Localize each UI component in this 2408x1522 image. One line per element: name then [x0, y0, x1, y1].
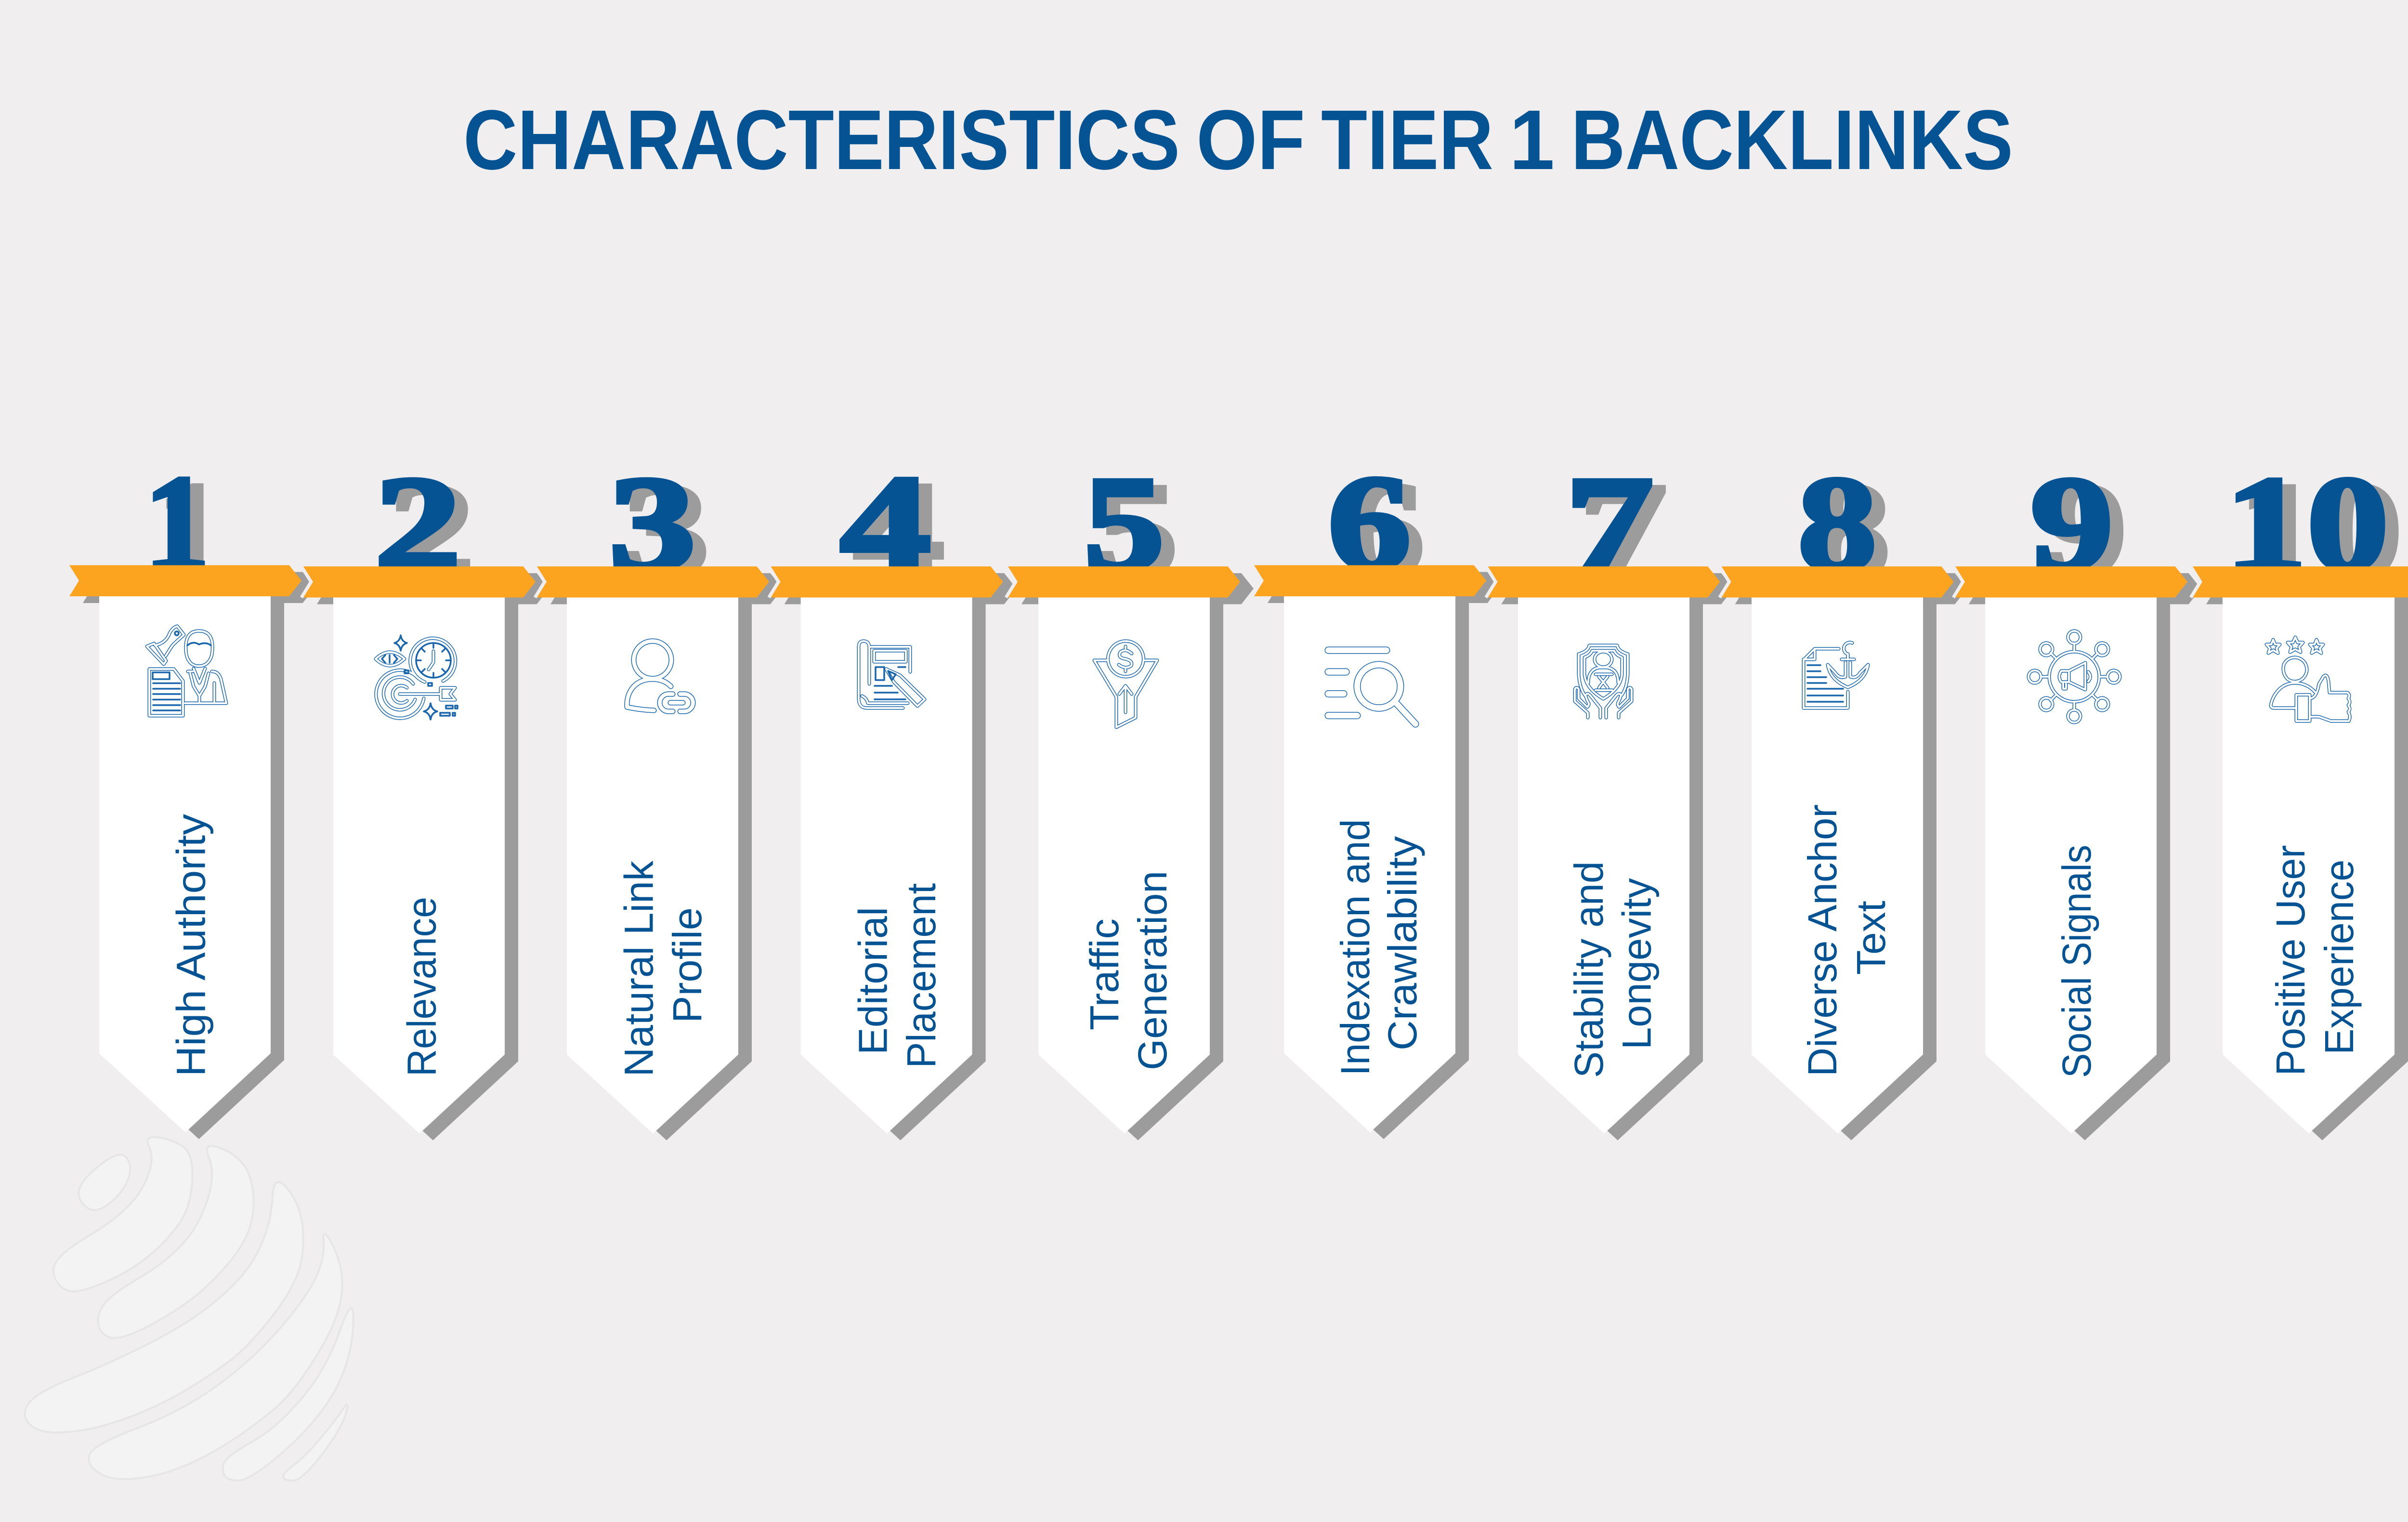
label [1333, 819, 1425, 1076]
icon: user with thumbs up and stars [2266, 637, 2350, 721]
number 6: 6 [1341, 454, 1425, 604]
label: Indexation and [1333, 819, 1378, 1076]
panel: card 8 Diverse Anchor Text [1720, 448, 1967, 1141]
title: OF [1196, 93, 1305, 187]
ribbon and card body [1006, 566, 1254, 1141]
panel: card 7 Stability and Longevity [1486, 448, 1734, 1141]
number 4: 4 [853, 454, 944, 604]
ribbon and card body [1254, 565, 1500, 1139]
label: Generation [1130, 871, 1175, 1070]
number 3: 3 [622, 455, 709, 605]
ribbon and card body [769, 566, 1017, 1141]
icon: dollar funnel [1094, 641, 1157, 727]
number 7 [1565, 448, 1667, 605]
label [1082, 871, 1175, 1070]
label: Natural Link [616, 860, 662, 1077]
label: Profile [665, 907, 710, 1023]
panel: card 2 Relevance [301, 448, 549, 1141]
label: Longevity [1614, 878, 1660, 1050]
label: Stability and [1566, 861, 1611, 1078]
number 6 [1328, 447, 1425, 604]
number 7: 7 [1565, 448, 1654, 599]
label: Traffic [1082, 918, 1127, 1030]
label: High Authority [169, 814, 214, 1076]
number 2: 2 [374, 448, 461, 599]
number 3 [609, 448, 709, 605]
number 5: 5 [1084, 448, 1165, 599]
icon: document with anchor [1804, 643, 1868, 708]
panel: card 1 High Authority [69, 447, 315, 1139]
icon: expert with document and stamp [147, 626, 226, 716]
icon: magnifier with list [1328, 650, 1415, 724]
panel: card 4 Editorial Placement [769, 447, 1017, 1141]
label: Editorial [851, 907, 896, 1055]
number 9 [2030, 448, 2127, 605]
number 8: 8 [1811, 455, 1890, 605]
label: Social Signals [2054, 845, 2099, 1078]
title: 1 [1509, 93, 1555, 187]
number 9: 9 [2030, 448, 2113, 599]
number 1: 1 [144, 447, 209, 598]
number 2 [374, 448, 475, 605]
label: Experience [2316, 860, 2362, 1055]
title: TIER [1321, 93, 1493, 187]
title: BACKLINKS [1571, 93, 2013, 187]
number 10: 10 [2238, 455, 2402, 605]
panel: card 5 Traffic Generation [1006, 448, 1254, 1141]
number 3: 3 [609, 448, 696, 599]
ribbon and card body [2191, 566, 2408, 1141]
ribbon and card body [535, 566, 783, 1141]
label: Placement [899, 883, 944, 1068]
number 4 [840, 447, 944, 604]
ribbon and card body [301, 566, 549, 1141]
number 5: 5 [1097, 455, 1178, 605]
number 7: 7 [1579, 455, 1667, 605]
label: Diverse Anchor [1800, 804, 1845, 1076]
icon: megaphone network [2028, 631, 2120, 722]
ribbon and card body [1953, 566, 2201, 1141]
label [616, 860, 710, 1077]
title [463, 93, 2013, 187]
number 10: 10 [2225, 448, 2389, 599]
label [2268, 845, 2362, 1076]
ribbon and card body [1486, 566, 1734, 1141]
label [851, 883, 944, 1068]
ribbon and card body [69, 565, 315, 1139]
label [1800, 804, 1894, 1076]
title: CHARACTERISTICS [463, 93, 1180, 187]
panel: card 3 Natural Link Profile [535, 448, 783, 1141]
label: Relevance [399, 897, 444, 1076]
number 8: 8 [1798, 448, 1877, 599]
panel: card 10 Positive User Experience [2191, 448, 2408, 1141]
number 9: 9 [2044, 455, 2127, 605]
panel: card 6 Indexation and Crawlability [1254, 447, 1500, 1139]
icon: target, clock and eye [376, 635, 458, 720]
number 1: 1 [158, 454, 223, 604]
icon: scroll with pencil [859, 641, 925, 708]
label: Crawlability [1380, 836, 1425, 1050]
number 5 [1084, 448, 1178, 605]
ribbon and card body [1720, 566, 1967, 1141]
icon: person with link [627, 641, 693, 711]
globe watermark [25, 1137, 353, 1481]
label [1566, 861, 1660, 1078]
label: Positive User [2268, 845, 2313, 1076]
icon: shield with hands and hourglass [1575, 645, 1632, 718]
number 6: 6 [1328, 447, 1411, 598]
number 4: 4 [840, 447, 931, 598]
number 2: 2 [388, 455, 475, 605]
label: Text [1848, 901, 1894, 975]
panel: card 9 Social Signals [1953, 448, 2201, 1141]
